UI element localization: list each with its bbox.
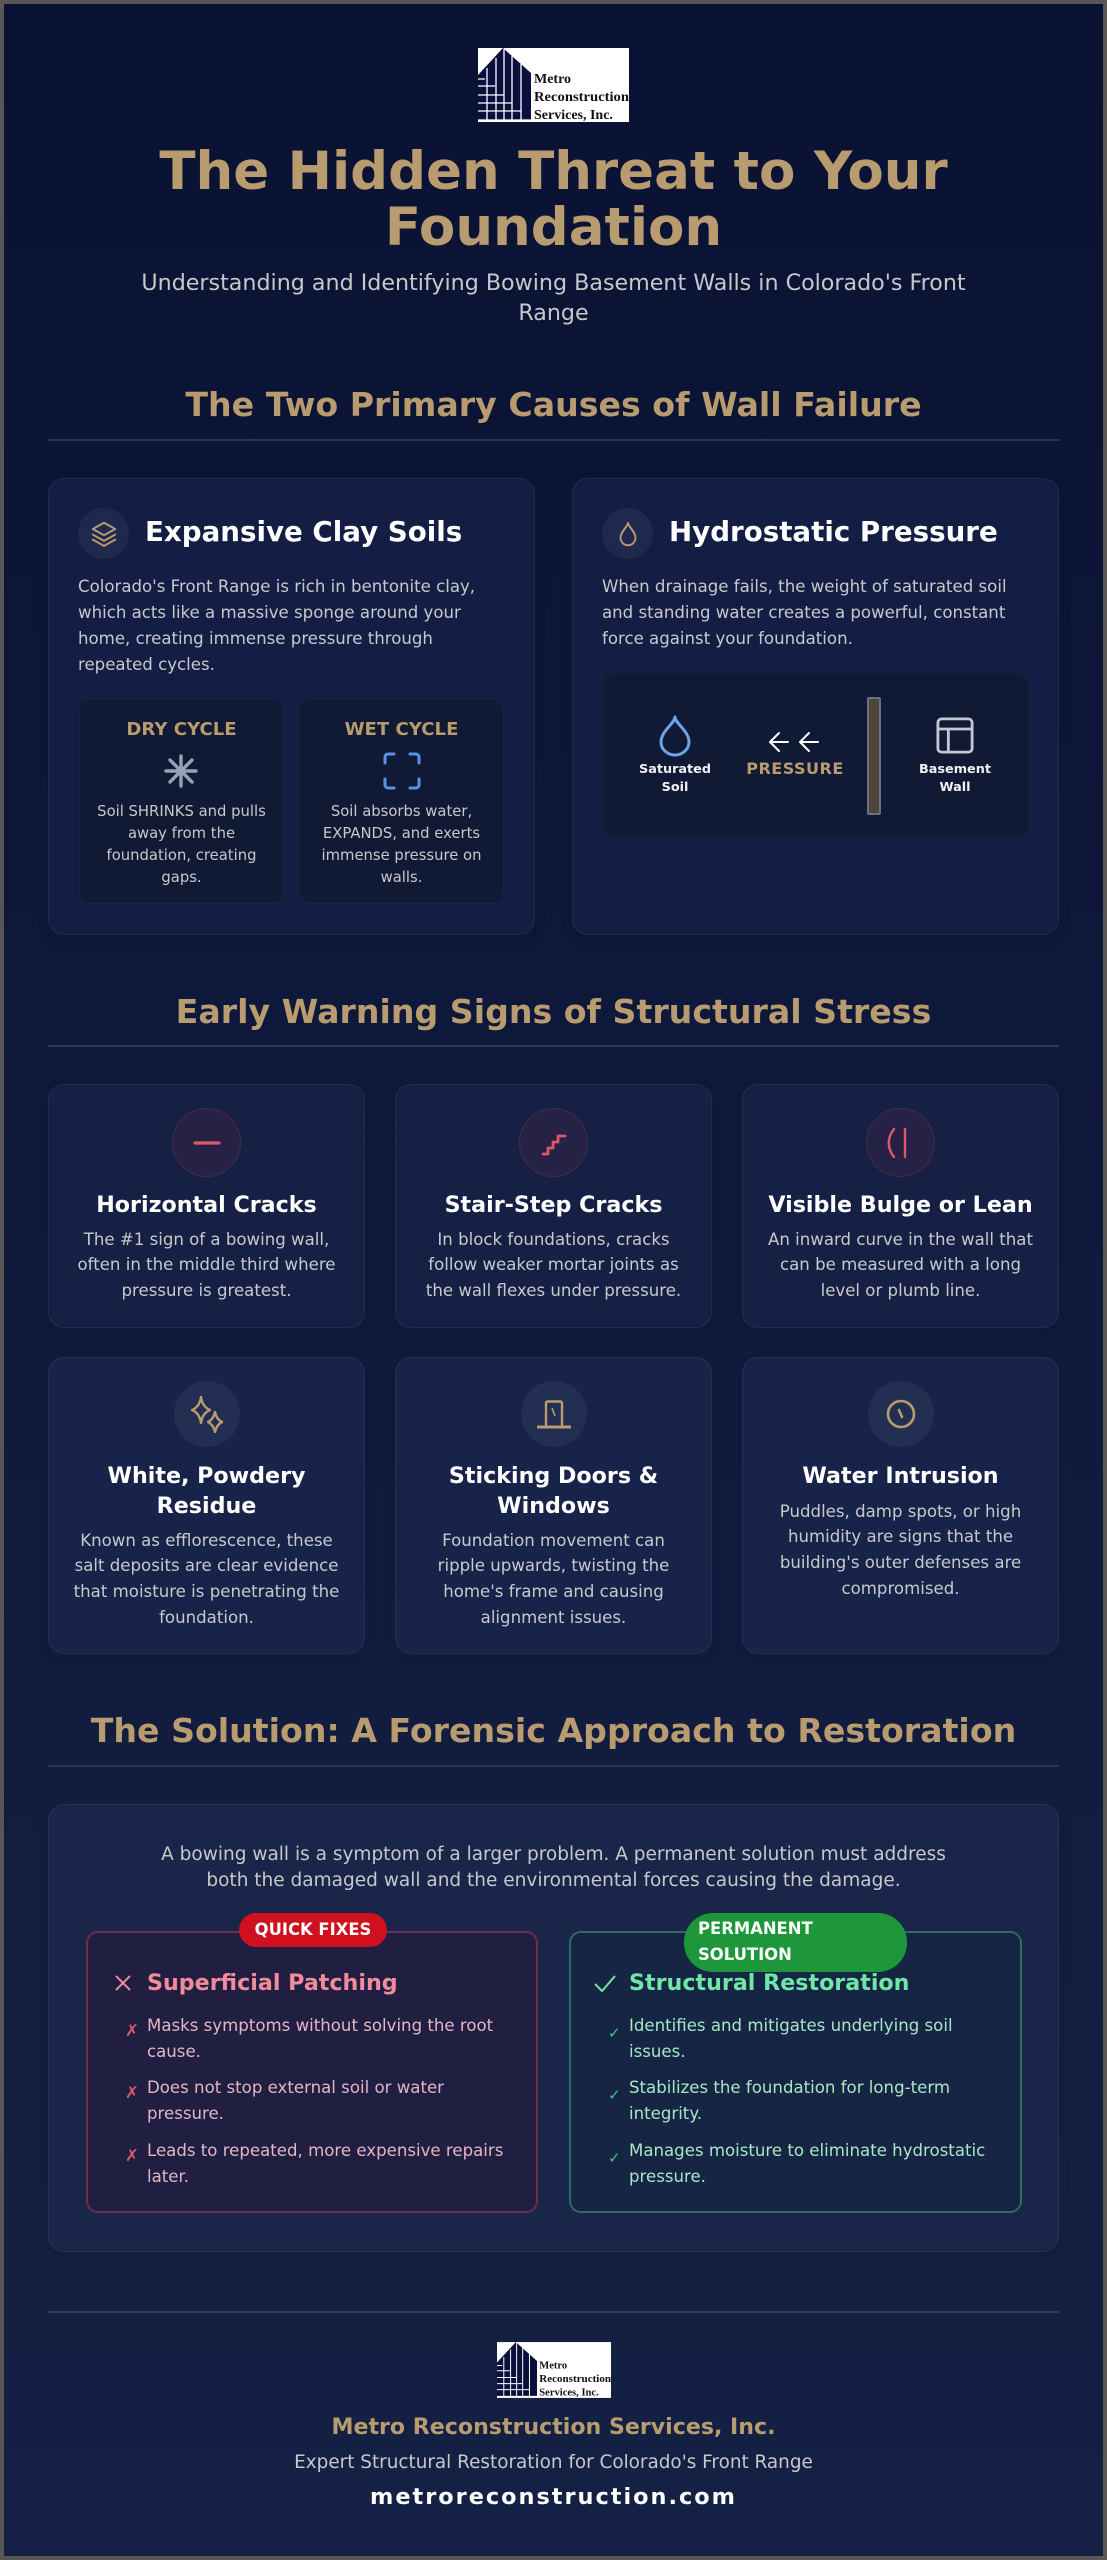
badge: permanent solution: PERMANENT	[698, 1919, 813, 1938]
list: quick fix drawbacks: ✗	[125, 2083, 139, 2102]
list: quick fix drawbacks: Masks symptoms without solving the root	[147, 2016, 493, 2035]
list: permanent benefits: issues.	[629, 2042, 686, 2061]
sign text: can be measured with a long	[780, 1255, 1021, 1274]
text: solution intro: both the damaged wall and the environmental forces causing the damage.	[206, 1870, 901, 1891]
subtitle: Understanding and Identifying Bowing Basement Walls in Colorado's Front	[141, 270, 966, 296]
icon: x	[115, 1975, 131, 1991]
panel: dry cycle	[79, 699, 284, 904]
title	[159, 141, 948, 258]
sign text	[438, 1530, 669, 1627]
text: wet cycle: immense pressure on	[322, 847, 481, 864]
list: permanent benefits: integrity.	[629, 2104, 702, 2123]
subtitle: Range	[518, 300, 589, 326]
icon: saturated soil drop	[660, 716, 690, 756]
label: pressure: PRESSURE	[746, 759, 844, 778]
text: hydrostatic description	[602, 577, 1007, 648]
text: dry cycle: Soil SHRINKS and pulls	[97, 803, 266, 820]
heading: structural restoration: Structural Restoration	[629, 1970, 909, 1996]
list: quick fix drawbacks: cause.	[147, 2042, 201, 2061]
icon: horizontal crack	[172, 1108, 241, 1177]
icon: layers	[78, 508, 129, 559]
list: permanent benefits: ✓	[608, 2149, 621, 2167]
text: dry cycle	[97, 803, 266, 886]
icon: droplet	[602, 508, 653, 559]
label: saturated soil: Saturated	[639, 762, 711, 777]
list: permanent benefits: Stabilizes the foundation for long-term	[629, 2078, 950, 2097]
icon: basement wall	[936, 718, 974, 754]
heading: the solution: The Solution: A Forensic Approach to Restoration	[91, 1711, 1016, 1750]
sign text: often in the middle third where	[78, 1255, 336, 1274]
sign text: follow weaker mortar joints as	[428, 1255, 679, 1274]
label: saturated soil	[639, 762, 711, 795]
label: basement wall: Basement	[919, 762, 991, 777]
text: wet cycle: EXPANDS, and exerts	[323, 825, 480, 842]
sign text	[78, 1230, 336, 1300]
panel: water intrusion	[742, 1357, 1059, 1654]
text: clay description: repeated cycles.	[78, 655, 215, 674]
heading: superficial patching: Superficial Patching	[147, 1970, 398, 1996]
badge: permanent solution	[684, 1913, 907, 1972]
arrows: pressure direction	[769, 732, 819, 752]
list: permanent benefits: pressure.	[629, 2167, 706, 2186]
sign text: ripple upwards, twisting the	[438, 1556, 669, 1575]
label: saturated soil: Soil	[662, 780, 688, 795]
text: dry cycle: gaps.	[161, 869, 202, 886]
icon: water gauge	[868, 1381, 934, 1447]
sign text: the wall flexes under pressure.	[426, 1281, 681, 1300]
panel: horizontal cracks	[48, 1084, 365, 1328]
panel: visible bulge	[742, 1084, 1059, 1328]
title: The Hidden Threat to Your	[159, 141, 948, 202]
text: clay description: home, creating immense pressure through	[78, 629, 433, 648]
text: hydrostatic description: force against your foundation.	[602, 629, 853, 648]
icon: door	[521, 1381, 587, 1447]
panel: sticking doors	[395, 1357, 712, 1654]
panel: quick fixes comparison	[86, 1931, 538, 2213]
label: wet cycle: WET CYCLE	[345, 719, 458, 740]
sign text	[426, 1230, 681, 1300]
sign text: humidity are signs that the	[788, 1527, 1013, 1546]
text: clay description	[78, 577, 475, 674]
list: permanent benefits: Identifies and mitigates underlying soil	[629, 2016, 953, 2035]
sign text: salt deposits are clear evidence	[75, 1556, 338, 1575]
sign text: alignment issues.	[481, 1608, 626, 1627]
text: dry cycle: foundation, creating	[106, 847, 256, 864]
list: permanent benefits	[608, 2016, 985, 2186]
sign title	[449, 1463, 658, 1519]
panel: expansive clay soils	[48, 478, 535, 935]
list: quick fix drawbacks: ✗	[125, 2021, 139, 2040]
text: clay description: Colorado's Front Range is rich in bentonite clay,	[78, 577, 475, 596]
label: basement wall: Wall	[939, 780, 971, 795]
footer url: metroreconstruction.com	[370, 2484, 737, 2510]
heading: two primary causes: The Two Primary Causes of Wall Failure	[185, 385, 922, 424]
footer logo: Reconstruction	[539, 2374, 611, 2385]
badge: quick fixes: QUICK FIXES	[255, 1920, 371, 1939]
label: dry cycle: DRY CYCLE	[126, 719, 237, 740]
sign text: level or plumb line.	[821, 1281, 980, 1300]
sign title: Horizontal Cracks	[96, 1192, 317, 1218]
list: quick fix drawbacks	[125, 2016, 503, 2186]
title: Foundation	[385, 196, 722, 258]
icon: check	[594, 1975, 616, 1992]
heading: warning signs: Early Warning Signs of Structural Stress	[176, 992, 931, 1031]
sign text: that moisture is penetrating the	[74, 1582, 339, 1601]
sign text: Known as efflorescence, these	[80, 1530, 333, 1550]
sign title: Water Intrusion	[802, 1463, 999, 1489]
list: permanent benefits: ✓	[608, 2024, 621, 2042]
sign title: Visible Bulge or Lean	[768, 1192, 1033, 1218]
text: wet cycle: walls.	[381, 869, 422, 886]
sign text: home's frame and causing	[443, 1582, 664, 1601]
icon: stair crack	[519, 1108, 588, 1177]
panel: white powdery residue	[48, 1357, 365, 1654]
text: solution intro	[161, 1844, 946, 1891]
panel: solution	[48, 1804, 1059, 2252]
card heading: hydrostatic pressure: Hydrostatic Pressure	[669, 515, 998, 548]
panel: permanent solution comparison	[569, 1931, 1022, 2213]
text: dry cycle: away from the	[128, 825, 235, 842]
sign text: In block foundations, cracks	[437, 1230, 670, 1248]
wall bar	[867, 697, 881, 815]
sign text	[780, 1502, 1021, 1598]
icon: wet expand	[384, 752, 420, 790]
list: quick fix drawbacks: ✗	[125, 2146, 139, 2165]
list: quick fix drawbacks: Does not stop external soil or water	[147, 2078, 444, 2097]
badge: quick fixes	[239, 1913, 387, 1947]
sign title: White, Powdery	[107, 1463, 306, 1489]
sign text	[768, 1230, 1033, 1300]
logo: Metro Reconstruction Services: Metro	[534, 72, 571, 87]
panel: wet cycle	[299, 699, 504, 904]
sign title: Residue	[157, 1493, 256, 1519]
text: hydrostatic description: When drainage fails, the weight of saturated soil	[602, 577, 1007, 596]
sign title	[107, 1463, 306, 1519]
footer logo: Metro	[539, 2360, 567, 2371]
text: clay description: which acts like a massive sponge around your	[78, 603, 461, 622]
sign text: Foundation movement can	[442, 1530, 665, 1550]
icon: sparkles	[174, 1381, 240, 1447]
sign text: Puddles, damp spots, or high	[780, 1502, 1021, 1520]
sign text: building's outer defenses are	[780, 1553, 1021, 1572]
sign text: compromised.	[841, 1579, 960, 1598]
sign text: An inward curve in the wall that	[768, 1230, 1033, 1248]
sign text	[74, 1530, 339, 1627]
badge: permanent solution: SOLUTION	[698, 1945, 792, 1964]
panel: hydrostatic pressure	[572, 478, 1059, 935]
logo: Metro Reconstruction Services	[478, 48, 629, 122]
label: basement wall	[919, 762, 991, 795]
footer tagline: Expert Structural Restoration for Colorado's Front Range	[294, 2452, 813, 2473]
sign text: foundation.	[159, 1608, 254, 1627]
diagram: pressure	[602, 674, 1029, 837]
footer company name: Metro Reconstruction Services, Inc.	[332, 2414, 776, 2440]
panel: stair-step cracks	[395, 1084, 712, 1328]
logo: Metro Reconstruction Services: Reconstruction	[534, 90, 629, 105]
text: solution intro: A bowing wall is a symptom of a larger problem. A permanent solution must address	[161, 1844, 946, 1865]
icon: dry asterisk	[164, 754, 198, 788]
text: wet cycle	[322, 803, 481, 886]
list: quick fix drawbacks: later.	[147, 2167, 189, 2186]
card heading: expansive clay soils: Expansive Clay Soils	[145, 515, 462, 548]
sign text: pressure is greatest.	[122, 1281, 292, 1300]
subtitle	[141, 270, 966, 326]
icon: bulge	[866, 1108, 935, 1177]
text: hydrostatic description: and standing water creates a powerful, constant	[602, 603, 1005, 622]
list: permanent benefits: ✓	[608, 2086, 621, 2104]
sign title: Stair-Step Cracks	[445, 1192, 662, 1218]
sign title: Sticking Doors &	[449, 1463, 658, 1489]
footer logo	[497, 2342, 611, 2398]
text: wet cycle: Soil absorbs water,	[331, 803, 472, 820]
list: quick fix drawbacks: pressure.	[147, 2104, 224, 2123]
sign title: Windows	[497, 1493, 610, 1519]
sign text: The #1 sign of a bowing wall,	[84, 1230, 329, 1248]
list: quick fix drawbacks: Leads to repeated, more expensive repairs	[147, 2141, 503, 2160]
list: permanent benefits: Manages moisture to eliminate hydrostatic	[629, 2141, 985, 2160]
